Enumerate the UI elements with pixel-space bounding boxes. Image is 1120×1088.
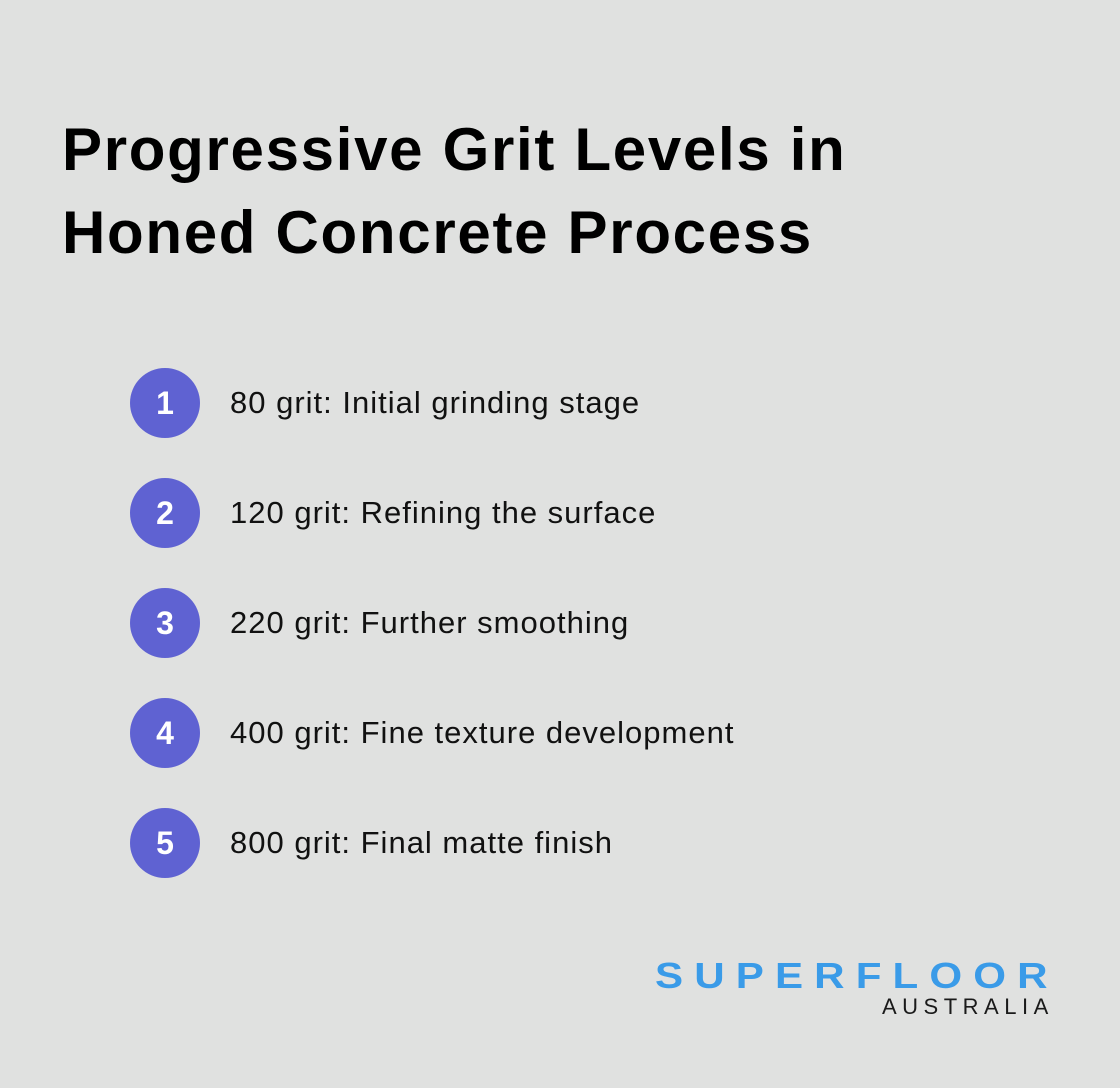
step 3 [130, 588, 629, 658]
logo: SUPERFLOOR [655, 955, 1059, 996]
step 4: 400 grit: Fine texture development [230, 715, 734, 750]
step 4 [130, 698, 734, 768]
title: Progressive Grit Levels in [62, 116, 847, 183]
step 5 [130, 808, 613, 878]
step 4: 4 [156, 715, 174, 751]
step 1 [130, 368, 640, 438]
step 2: 2 [156, 495, 174, 531]
step 3: 3 [156, 605, 174, 641]
step 3: 220 grit: Further smoothing [230, 605, 629, 640]
step 1: 80 grit: Initial grinding stage [230, 385, 640, 420]
step 5: 5 [156, 825, 174, 861]
step 2 [130, 478, 656, 548]
title [62, 116, 847, 266]
logo: AUSTRALIA [882, 994, 1054, 1019]
title: Honed Concrete Process [62, 199, 813, 266]
logo [655, 955, 1059, 1019]
step 2: 120 grit: Refining the surface [230, 495, 656, 530]
step 5: 800 grit: Final matte finish [230, 825, 613, 860]
step 1: 1 [156, 385, 174, 421]
